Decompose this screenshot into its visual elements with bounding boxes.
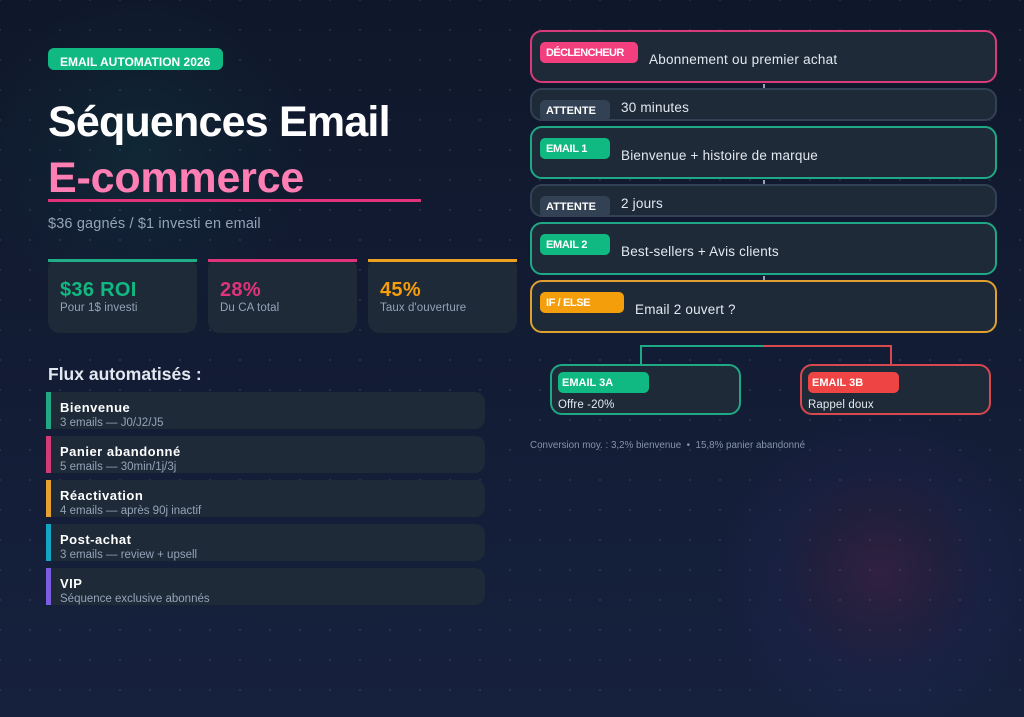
flow node: wait 30 minutes: [530, 88, 997, 121]
stat value: 45%: [380, 279, 421, 301]
branch node: email 3A: [550, 364, 741, 415]
badge: email automation 2026: EMAIL AUTOMATION 2026: [60, 55, 210, 69]
badge: email automation 2026: [48, 48, 223, 70]
stat value: 28%: [220, 279, 261, 301]
node text: Bienvenue + histoire de marque: [621, 148, 818, 163]
flow item: Bienvenue: [46, 392, 485, 429]
section heading: automated flows: Flux automatisés :: [48, 364, 202, 384]
pill: email 3A: [558, 372, 649, 393]
flow item: Bienvenue: 3 emails — J0/J2/J5: [60, 417, 164, 429]
pill: if/else: IF / ELSE: [546, 297, 590, 309]
flow item: VIP: VIP: [60, 576, 82, 591]
pill: email 1: [540, 138, 610, 159]
node text: Offre -20%: [558, 399, 614, 411]
flow item: Post-achat: Post-achat: [60, 532, 131, 547]
pill: attente: [540, 100, 610, 121]
pill: email 3A: EMAIL 3A: [562, 377, 613, 389]
branch connector: no: [764, 345, 892, 365]
flow item: VIP: [46, 568, 485, 605]
branch node: email 3B: [800, 364, 991, 415]
flow node: if/else: [530, 280, 997, 333]
pill: email 1: EMAIL 1: [546, 143, 587, 155]
flow item: Réactivation: Réactivation: [60, 488, 143, 503]
flow item: Panier abandonné: [46, 436, 485, 473]
pill: déclencheur: [540, 42, 638, 63]
pill: déclencheur: DÉCLENCHEUR: [546, 47, 624, 59]
flow item: VIP: Séquence exclusive abonnés: [60, 593, 210, 605]
flow item: Bienvenue: Bienvenue: [60, 400, 130, 415]
pill: email 2: [540, 234, 610, 255]
title: E-commerce: E-commerce: [48, 154, 304, 202]
flow item: Post-achat: 3 emails — review + upsell: [60, 549, 197, 561]
pill: attente: ATTENTE: [546, 201, 596, 213]
stat label: Taux d'ouverture: [380, 302, 466, 314]
flow node: email 1: [530, 126, 997, 179]
subtitle: $36 gagnés / $1 investi en email: [48, 216, 261, 232]
flow item: Réactivation: [46, 480, 485, 517]
node text: Abonnement ou premier achat: [649, 52, 837, 67]
title underline: [48, 199, 421, 202]
stat label: Du CA total: [220, 302, 279, 314]
flow node: wait 2 days: [530, 184, 997, 217]
node text: Rappel doux: [808, 399, 874, 411]
stat card: ROI: [48, 259, 197, 333]
node text: 30 minutes: [621, 100, 689, 115]
pill: if/else: [540, 292, 624, 313]
pill: email 3B: EMAIL 3B: [812, 377, 863, 389]
flow node: trigger: [530, 30, 997, 83]
node text: 2 jours: [621, 196, 663, 211]
pill: email 3B: [808, 372, 899, 393]
connector: email 2 to if/else: [763, 276, 765, 280]
connector: trigger to wait: [763, 84, 765, 88]
stat card: share of revenue: [208, 259, 357, 333]
connector: email 1 to wait: [763, 180, 765, 184]
node text: Email 2 ouvert ?: [635, 302, 736, 317]
footnote: conversion: Conversion moy. : 3,2% bienvenue • 15,8% panier abandonné: [530, 440, 805, 451]
pill: email 2: EMAIL 2: [546, 239, 587, 251]
flow item: Réactivation: 4 emails — après 90j inactif: [60, 505, 201, 517]
flow node: email 2: [530, 222, 997, 275]
flow item: Panier abandonné: Panier abandonné: [60, 444, 181, 459]
pill: attente: [540, 196, 610, 217]
stat label: Pour 1$ investi: [60, 302, 138, 314]
pill: attente: ATTENTE: [546, 105, 596, 117]
node text: Best-sellers + Avis clients: [621, 244, 779, 259]
stat value: $36 ROI: [60, 279, 137, 301]
stat card: open rate: [368, 259, 517, 333]
title: Séquences Email: Séquences Email: [48, 98, 390, 146]
flow item: Panier abandonné: 5 emails — 30min/1j/3j: [60, 461, 176, 473]
branch connector: yes: [640, 345, 764, 365]
flow item: Post-achat: [46, 524, 485, 561]
